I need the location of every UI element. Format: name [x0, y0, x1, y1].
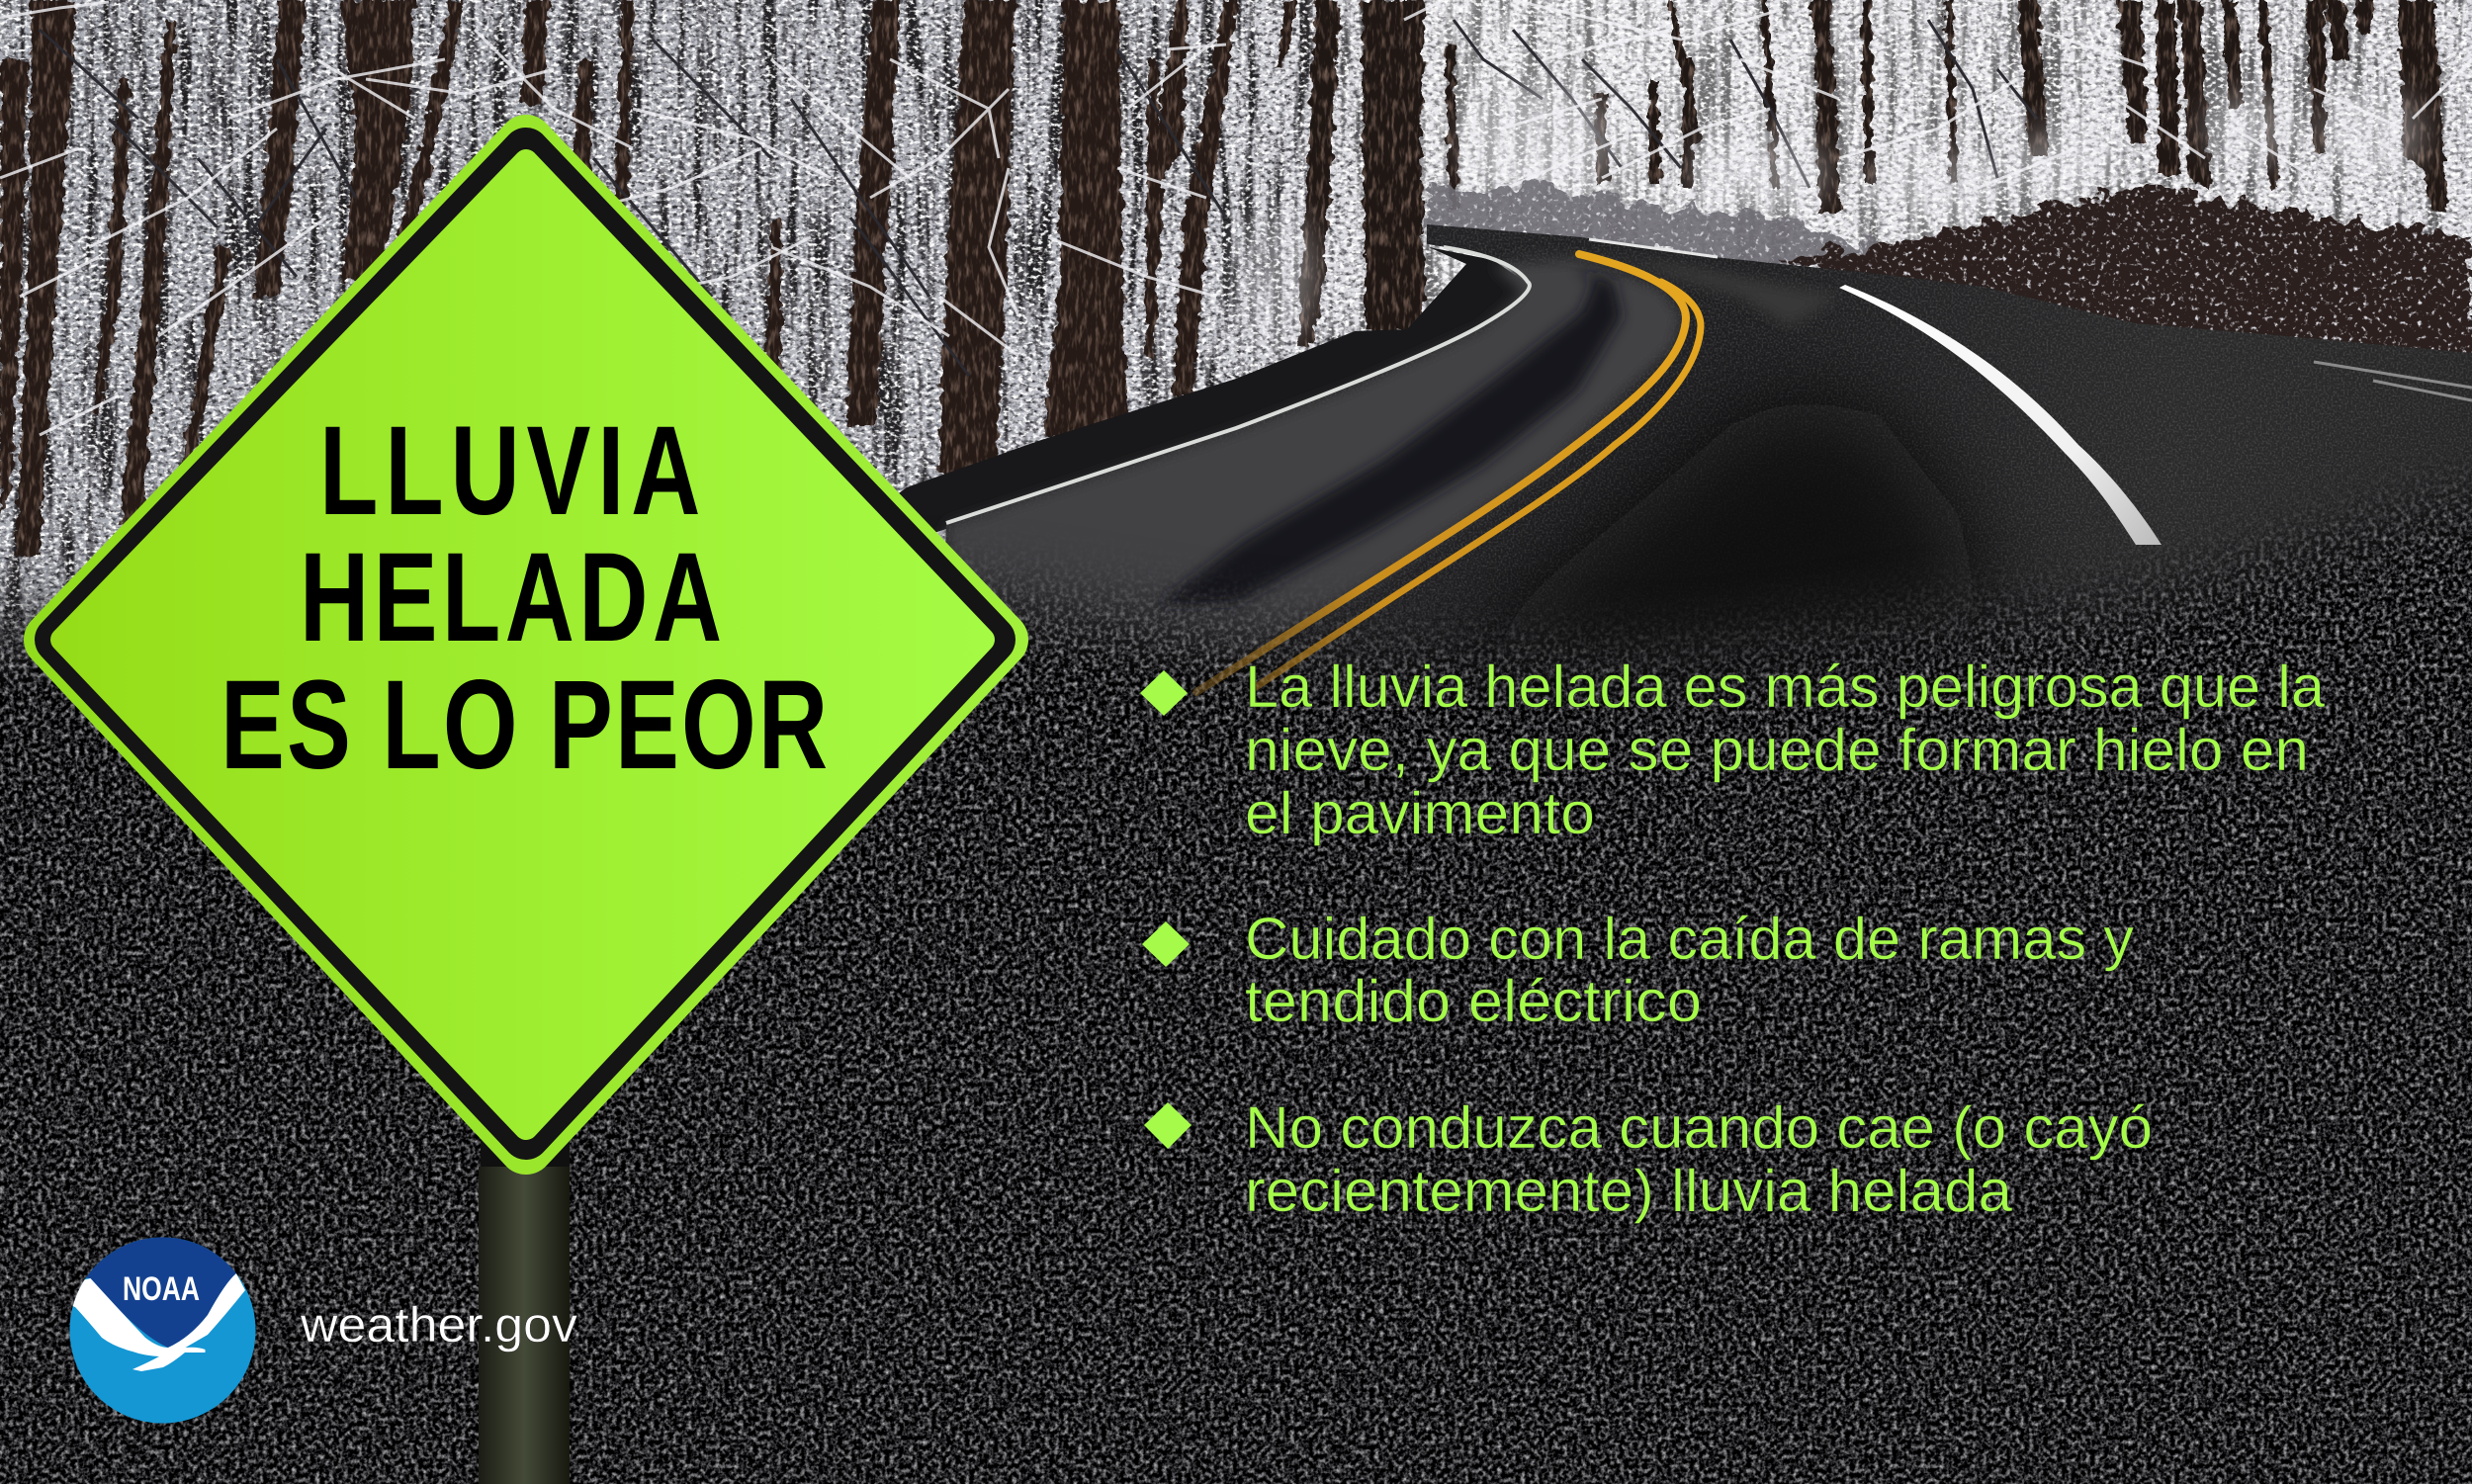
sign text: ES LO PEOR: [221, 655, 828, 796]
dark wet patch at centre of road: [1434, 395, 1987, 692]
sign post: [479, 1127, 570, 1484]
bullet 3: No conduzca cuando cae (o cayó: [1245, 1094, 2153, 1161]
bullet 1: [1140, 654, 2326, 846]
asphalt foreground: [0, 457, 2472, 1484]
NOAA logo: NOAA: [123, 1270, 200, 1308]
brightening of frost toward the curve: [1285, 0, 2472, 336]
sign black border: [58, 151, 992, 1136]
sign outer green edge: [51, 142, 1001, 1147]
bullet 2: Cuidado con la caída de ramas y: [1245, 906, 2134, 972]
bullet 3: [1144, 1094, 2153, 1224]
road edge line, left: [946, 247, 1530, 523]
bullet 3: recientemente) lluvia helada: [1245, 1158, 2013, 1224]
NOAA logo: [69, 1238, 255, 1424]
sign text: [221, 400, 828, 796]
tree trunks behind the curve: [1297, 0, 2448, 348]
sign inner face: [62, 161, 983, 1128]
dark tire track in the lane: [1157, 267, 1622, 605]
tree trunks left of the road: [0, 0, 1297, 554]
road sign: [51, 142, 1001, 1147]
white edge lines, right: [1589, 239, 2472, 545]
snow on the hillside: [1236, 84, 2423, 346]
bullet list: [1140, 654, 2326, 1224]
sign text: HELADA: [300, 527, 722, 668]
frost covered branches, white: [0, 0, 2472, 435]
far lane highlight: [1483, 247, 1839, 326]
bullet 2: [1142, 906, 2134, 1034]
background: frosted forest: [0, 0, 2472, 692]
sign text: LLUVIA: [319, 400, 700, 542]
road surface: [939, 224, 2472, 712]
website label: weather.gov: [300, 1297, 577, 1353]
bullet 1: nieve, ya que se puede formar hielo en: [1245, 717, 2309, 783]
bullet 1: La lluvia helada es más peligrosa que la: [1245, 654, 2326, 720]
thin bare branches, dark: [40, 20, 2037, 376]
brown hillside above the road: [1780, 188, 2472, 366]
double yellow centre lines: [1196, 254, 1701, 692]
lighter worn lane: [946, 259, 1681, 662]
bullet 1: el pavimento: [1245, 780, 1595, 846]
mixed snow and earth on the lower slope: [1425, 183, 1879, 282]
bullet 2: tendido eléctrico: [1245, 968, 1702, 1034]
road shoulder on the inside of the curve: [870, 247, 1533, 554]
